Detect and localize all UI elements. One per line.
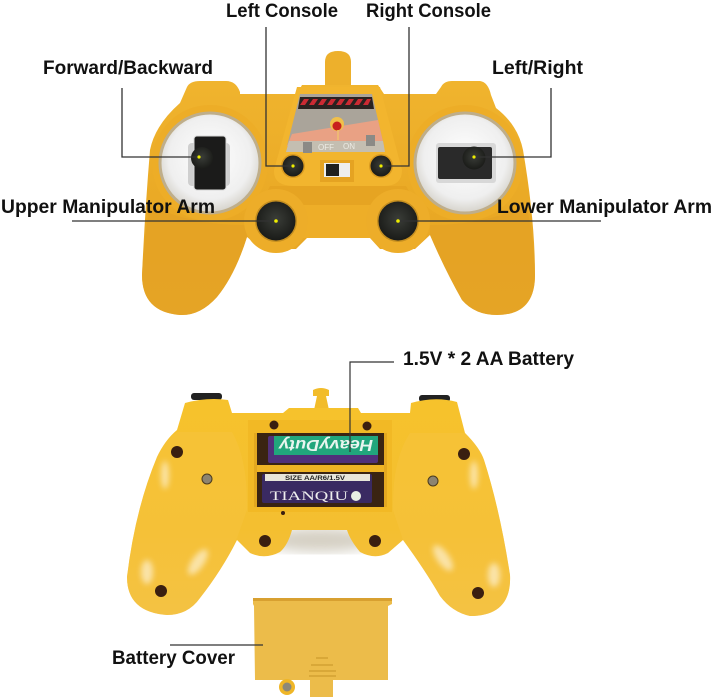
yellow leader dots bbox=[197, 155, 476, 223]
label: battery spec: 1.5V * 2 AA Battery bbox=[403, 349, 574, 370]
grey screws bbox=[202, 474, 438, 486]
centre printed label: OFF bbox=[318, 143, 334, 152]
right stick disc bbox=[407, 105, 523, 221]
leader lines top bbox=[72, 27, 601, 221]
left stick disc bbox=[152, 105, 268, 221]
screw holes bbox=[155, 420, 484, 599]
upper arm button bbox=[244, 189, 308, 253]
left console button bbox=[281, 154, 305, 178]
grip highlights bbox=[141, 461, 500, 587]
label: Lower Manipulator Arm: Lower Manipulator Arm bbox=[497, 197, 712, 218]
centre printed label bbox=[286, 94, 385, 153]
battery 2: TIANQIU bbox=[270, 488, 349, 503]
battery 1 bbox=[268, 436, 378, 463]
body bbox=[127, 399, 510, 616]
label: Left/Right: Left/Right bbox=[492, 58, 584, 79]
antenna stub bbox=[313, 388, 329, 410]
label: Right Console: Right Console bbox=[366, 1, 491, 22]
battery compartment bbox=[248, 420, 392, 512]
battery 2 bbox=[262, 474, 372, 503]
label: Forward/Backward: Forward/Backward bbox=[43, 58, 213, 79]
shoulder buttons bbox=[191, 393, 222, 400]
leader lines bottom bbox=[170, 362, 394, 645]
battery 2: SIZE AA/R6/1.5V bbox=[285, 476, 345, 482]
lower arm button bbox=[366, 189, 430, 253]
cover screw bbox=[279, 679, 295, 695]
top controller: front view bbox=[142, 51, 535, 315]
battery cover bbox=[253, 598, 392, 697]
battery 1: HeavyDuty bbox=[278, 436, 373, 453]
label: Left Console: Left Console bbox=[226, 1, 338, 22]
label: Battery Cover: Battery Cover bbox=[112, 648, 236, 669]
power slide switch bbox=[320, 160, 354, 182]
antenna bbox=[325, 51, 351, 88]
centre raised panel bbox=[274, 87, 402, 186]
shadow bbox=[265, 528, 375, 552]
centre printed label: ON bbox=[343, 142, 355, 151]
bottom controller: rear view bbox=[127, 388, 510, 616]
right console button bbox=[369, 154, 393, 178]
cover ridges bbox=[309, 657, 336, 677]
controller body bbox=[142, 81, 535, 315]
grip contours bbox=[127, 432, 247, 615]
grip shading bbox=[142, 205, 247, 315]
label: Upper Manipulator Arm: Upper Manipulator Arm bbox=[1, 197, 215, 218]
